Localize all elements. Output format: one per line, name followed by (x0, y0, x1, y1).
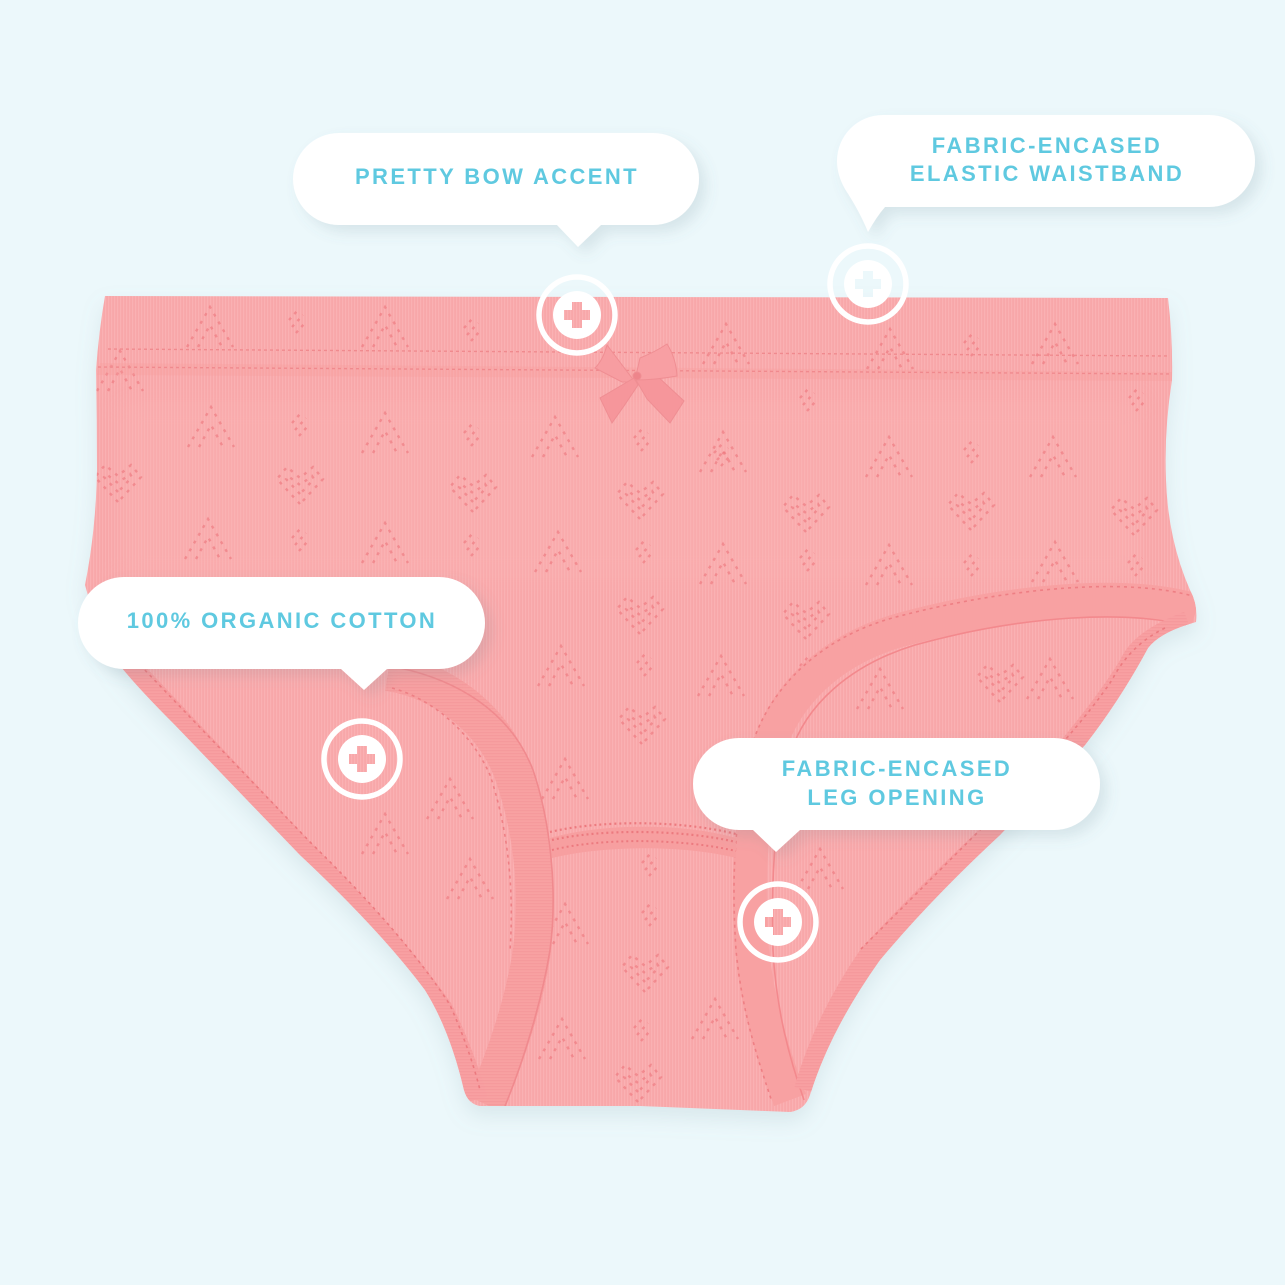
icon: plus marker at leg opening (740, 884, 816, 960)
callout: pretty bow accent: PRETTY BOW ACCENT (355, 164, 639, 189)
bow accent (595, 344, 684, 423)
callout: leg opening: FABRIC-ENCASED (782, 756, 1012, 781)
callout: organic cotton: 100% ORGANIC COTTON (127, 608, 437, 633)
fabric knit and pointelle hearts (80, 290, 1205, 1120)
icon: plus marker at bow (539, 277, 615, 353)
garment body (85, 296, 1196, 1112)
outer leg hems (125, 622, 1188, 1100)
callout: pretty bow accent (293, 133, 699, 247)
callout: elastic waistband: FABRIC-ENCASED (932, 133, 1162, 158)
waistband stitching (97, 349, 1172, 381)
icon: plus marker at waistband (830, 246, 906, 322)
callout: leg opening: LEG OPENING (807, 785, 987, 810)
product photo: pink underwear (80, 290, 1205, 1120)
gusset seam (550, 823, 736, 858)
icon: plus marker at cotton (324, 721, 400, 797)
callout: organic cotton (78, 577, 485, 690)
right leg opening band (734, 587, 1196, 1102)
callout: leg opening (693, 738, 1100, 852)
callout: elastic waistband: ELASTIC WAISTBAND (910, 161, 1184, 186)
callout: elastic waistband (837, 115, 1255, 232)
left leg opening band (388, 668, 553, 1106)
